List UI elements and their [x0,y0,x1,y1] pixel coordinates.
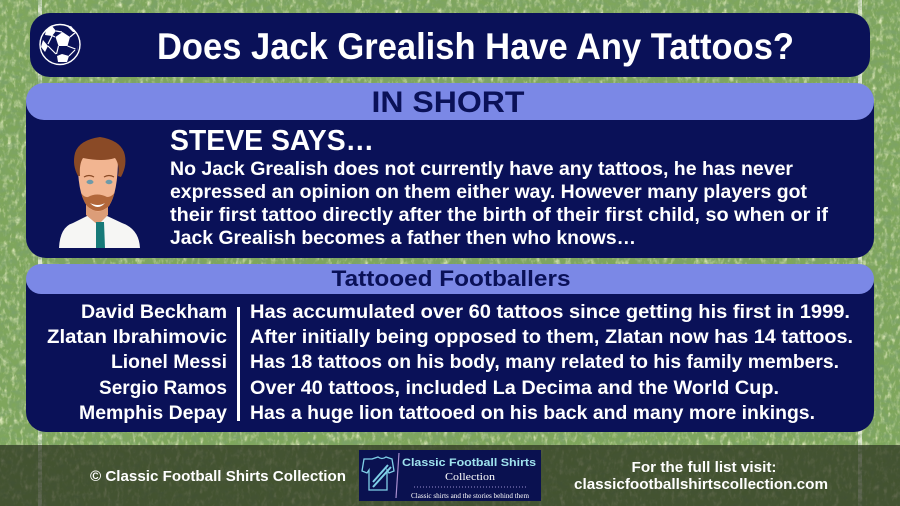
icon: shirt [362,457,394,490]
title banner [30,13,870,77]
footballer names: Lionel Messi [111,351,227,373]
footballer tattoo facts: Has a huge lion tattooed on his back and many more inkings. [250,402,815,424]
title text: Does Jack Grealish Have Any Tattoos? [157,26,794,67]
logo: Classic Football Shirts Collection: Classic shirts and the stories behind them [411,492,530,500]
footballer tattoo facts: Over 40 tattoos, included La Decima and the World Cup. [250,377,779,399]
steve says body text: Jack Grealish becomes a father then who knows… [170,227,636,249]
footballer names: David Beckham [81,301,227,323]
tattooed footballers header: Tattooed Footballers [332,266,570,291]
tattooed footballers header [26,264,874,294]
steve says heading: STEVE SAYS… [170,125,374,157]
footballer tattoo facts: Has 18 tattoos on his body, many related to his family members. [250,351,839,373]
footer call to action [574,460,828,493]
in short header [26,83,874,120]
in short header: IN SHORT [372,86,524,119]
footballer names: Memphis Depay [79,402,227,424]
logo: Classic Football Shirts Collection [359,450,541,501]
footballer names: Zlatan Ibrahimovic [47,326,227,348]
logo: Classic Football Shirts Collection: Classic Football Shirts [402,457,536,469]
steve says body text: No Jack Grealish does not currently have any tattoos, he has never [170,158,793,180]
logo: Classic Football Shirts Collection: Collection [445,471,496,483]
footer call to action: classicfootballshirtscollection.com [574,476,828,493]
footer call to action: For the full list visit: [632,460,776,476]
footballer tattoo facts [250,301,853,424]
steve says body text [170,158,829,249]
footballer names: Sergio Ramos [99,377,227,399]
footballer tattoo facts: After initially being opposed to them, Zlatan now has 14 tattoos. [250,326,853,348]
footballer tattoo facts: Has accumulated over 60 tattoos since getting his first in 1999. [250,301,850,323]
icon: Steve avatar [59,137,140,248]
footer copyright: © Classic Football Shirts Collection [90,468,346,485]
footballer names [47,301,227,424]
panel: tattooed footballers [26,264,874,432]
steve says body text: their first tattoo directly after the birth of their first child, so when or if [170,204,829,226]
panel: in short [26,83,874,258]
icon: football [40,24,80,64]
steve says body text: expressed an opinion on them either way. However many players got [170,181,807,203]
footer band [0,445,900,506]
